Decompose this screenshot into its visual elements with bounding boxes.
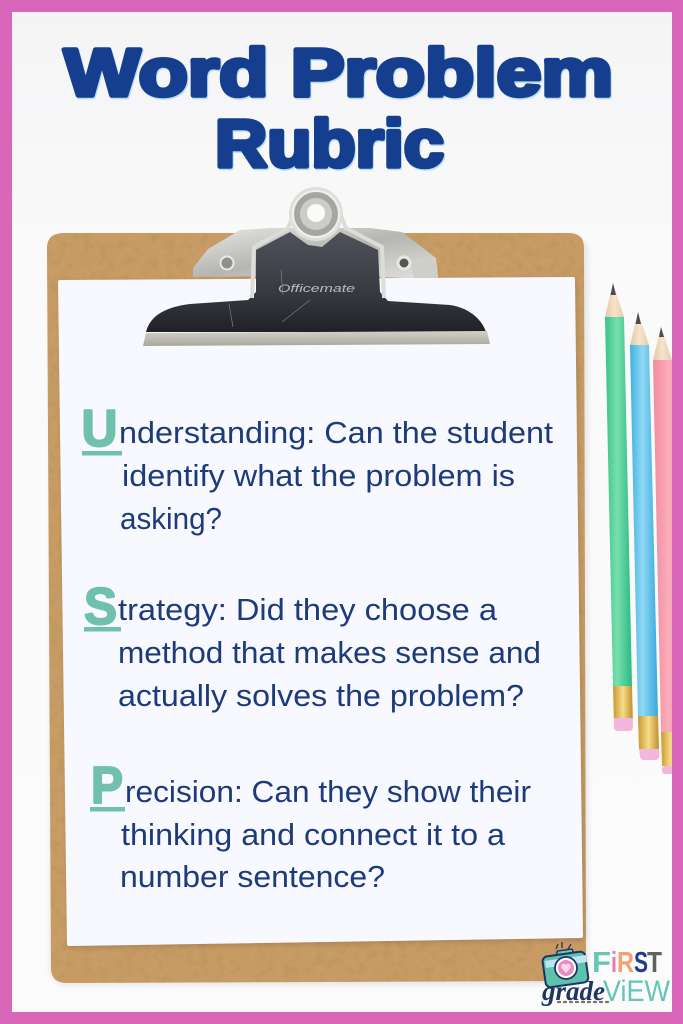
logo wordmark: i: [611, 947, 617, 979]
clip silver edges: [252, 193, 384, 298]
P section: precision: [90, 757, 531, 894]
logo wordmark: F: [592, 947, 611, 979]
big letter S: S: [84, 578, 117, 636]
clip dark plate: [146, 232, 486, 332]
clipboard board: [47, 233, 588, 985]
precision text: recision: Can they show their: [125, 774, 531, 809]
precision text: thinking and connect it to a: [121, 817, 506, 852]
icon: camera: [542, 942, 589, 988]
understanding text: nderstanding: Can the student: [119, 415, 553, 450]
understanding text: asking?: [120, 501, 222, 536]
logo wordmark: R: [617, 947, 634, 979]
title: Word Problem: [65, 37, 614, 112]
big letter P: P: [91, 757, 123, 815]
logo wordmark: T: [647, 947, 662, 979]
understanding text: identify what the problem is: [122, 458, 515, 493]
metal clip: [143, 187, 490, 346]
logo dots: [558, 1001, 608, 1003]
clip scratches: [229, 270, 310, 327]
pink pencil: [653, 327, 680, 774]
logo: First Grade View: [541, 942, 671, 1008]
precision text: number sentence?: [120, 859, 385, 894]
S section: strategy: [84, 578, 541, 713]
clip side wings: [193, 228, 438, 278]
clip brand text: Officemate: [278, 283, 355, 295]
title: Rubric: [215, 106, 444, 182]
logo wordmark: S: [634, 947, 648, 979]
strategy text: method that makes sense and: [118, 635, 541, 670]
paper sheet: [58, 277, 584, 948]
title: [64, 36, 614, 183]
strategy text: trategy: Did they choose a: [118, 592, 498, 627]
pencils: [605, 283, 680, 774]
green pencil: [605, 283, 633, 731]
precision text: [120, 774, 531, 894]
clip lower bar: [143, 331, 490, 346]
big letter U: U: [82, 400, 118, 458]
logo wordmark: [541, 947, 671, 1008]
title: Rubric: [216, 108, 445, 183]
clip ring: [289, 187, 343, 241]
logo wordmark: ViEW: [603, 975, 671, 1008]
strategy text: actually solves the problem?: [118, 678, 524, 713]
logo wordmark: grade: [541, 976, 605, 1006]
U section: understanding: [82, 400, 553, 536]
understanding text: [119, 415, 553, 536]
title: Word Problem: [64, 36, 613, 110]
strategy text: [118, 592, 541, 713]
blue pencil: [630, 312, 659, 760]
